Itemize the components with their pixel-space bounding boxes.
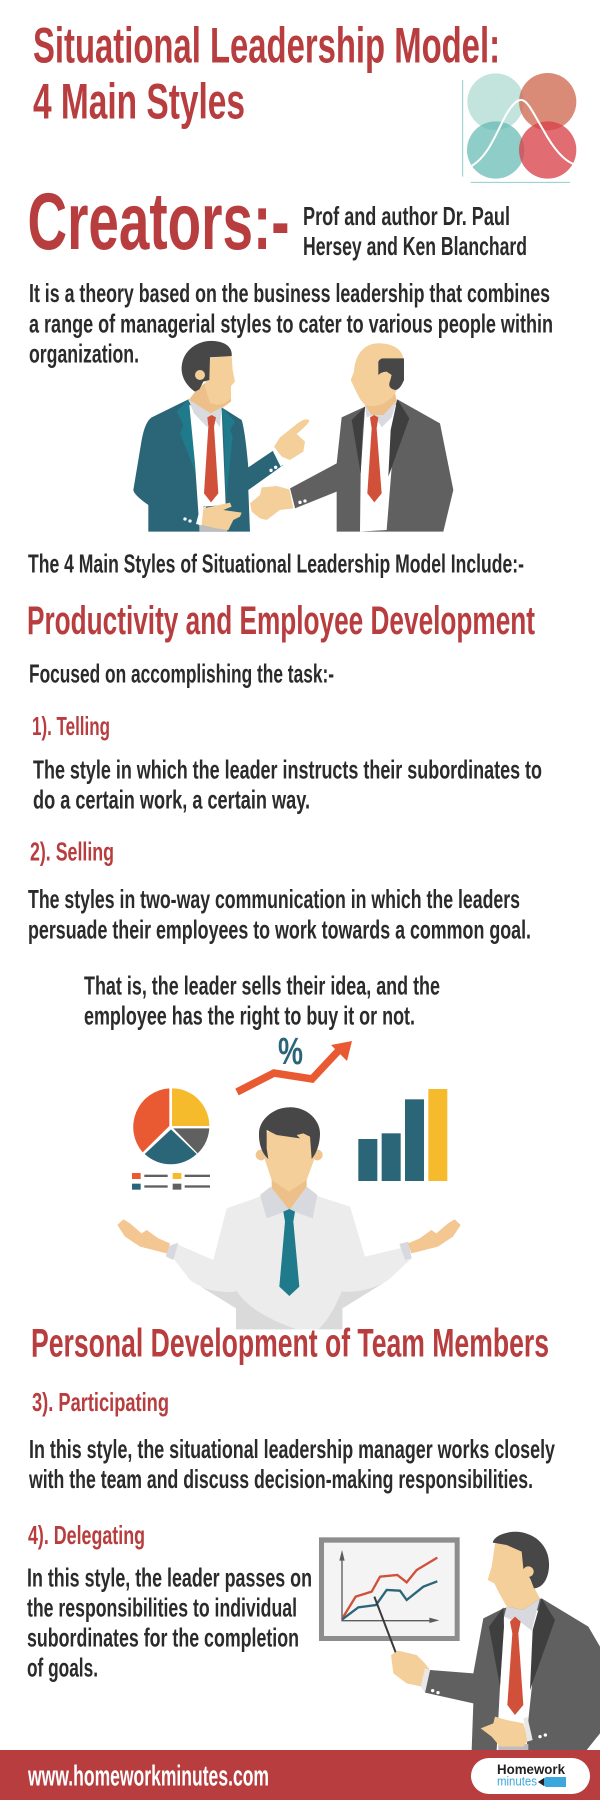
chart legend <box>132 1173 210 1190</box>
title: 4 Main Styles <box>33 74 245 130</box>
text: delegating description: the responsibilities to individual <box>27 1593 297 1623</box>
presenter figure <box>374 1532 600 1750</box>
text: telling description: do a certain work, a certain way. <box>33 785 310 815</box>
logo: homework minutes: Homework <box>497 1761 565 1777</box>
text: theory description <box>29 278 553 368</box>
bar chart <box>358 1089 447 1181</box>
text: selling note <box>84 971 440 1031</box>
man in teal suit <box>133 341 309 532</box>
pie chart <box>133 1088 209 1164</box>
percent symbol: % <box>278 1031 303 1073</box>
text: telling description <box>33 755 542 815</box>
man in grey suit <box>250 343 453 532</box>
text: theory description: organization. <box>29 338 139 368</box>
text: delegating description: subordinates for the completion <box>27 1623 299 1653</box>
logo: homework minutes <box>471 1758 590 1794</box>
text: selling note: employee has the right to buy it or not. <box>84 1001 415 1031</box>
footer bar <box>0 1750 600 1800</box>
illustration: manager with charts <box>117 1088 461 1329</box>
text: creator names: Prof and author Dr. Paul <box>303 201 510 231</box>
title <box>33 18 500 130</box>
text: creator names <box>303 201 527 261</box>
text: selling note: That is, the leader sells their idea, and the <box>84 971 440 1001</box>
icon: four circles with bell curve <box>463 73 576 182</box>
heading: creators: Creators:- <box>28 177 290 267</box>
logo: homework minutes: minutes <box>497 1774 537 1788</box>
manager figure <box>117 1107 461 1329</box>
footer url: www.homeworkminutes.com <box>27 1761 269 1793</box>
text: participating description <box>28 1434 555 1494</box>
arrow: rising trend <box>237 1041 352 1092</box>
text: delegating description: of goals. <box>27 1653 98 1683</box>
subheading: selling: 2). Selling <box>30 837 114 867</box>
text: focused on task: Focused on accomplishing the task:- <box>29 659 334 689</box>
illustration: presenter with chart board <box>319 1532 600 1750</box>
illustration: two businessmen talking <box>133 341 453 532</box>
subheading: participating: 3). Participating <box>32 1387 169 1417</box>
chart board <box>319 1537 460 1641</box>
text: delegating description <box>27 1563 312 1683</box>
text: delegating description: In this style, the leader passes on <box>27 1563 312 1593</box>
subheading: delegating: 4). Delegating <box>28 1520 145 1550</box>
subheading: telling: 1). Telling <box>32 711 110 741</box>
text: selling description <box>28 884 531 945</box>
